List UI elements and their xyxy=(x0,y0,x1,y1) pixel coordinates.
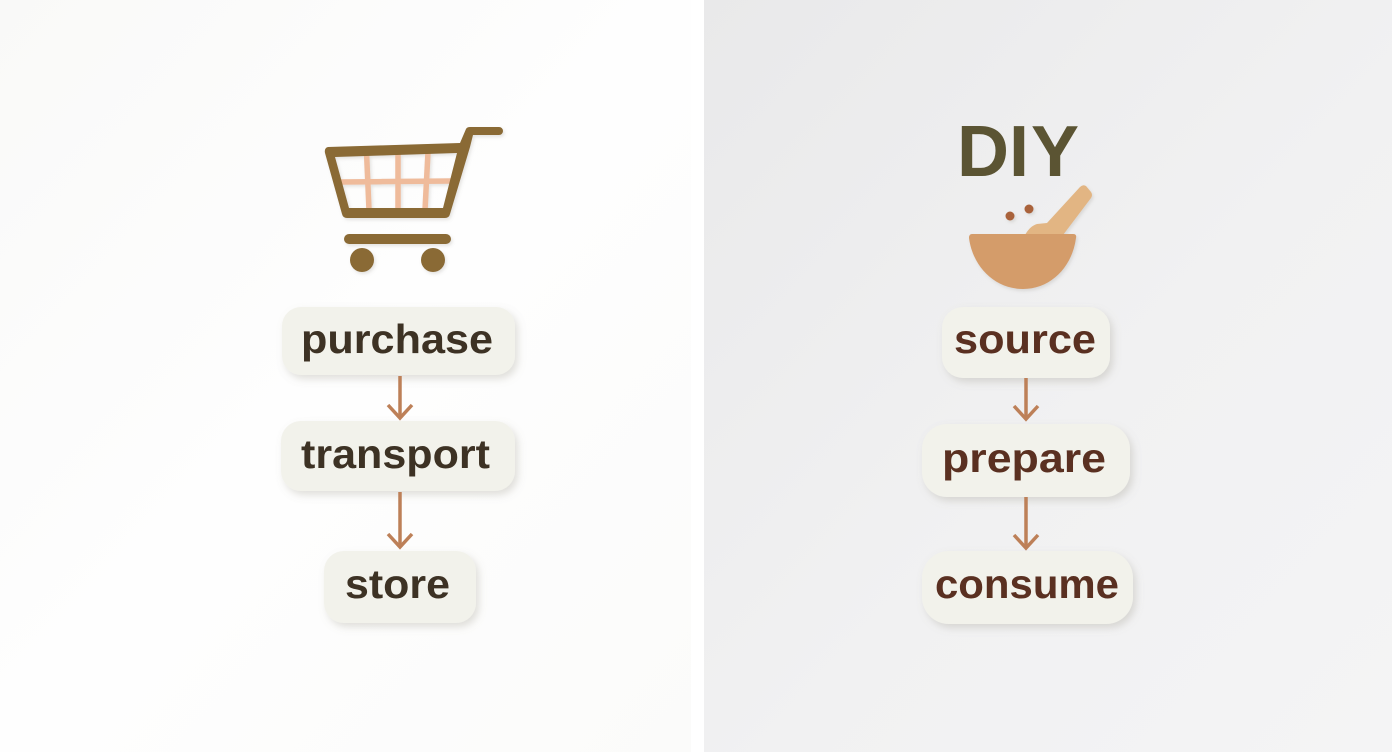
node: store: store xyxy=(345,561,450,607)
icon: mixing bowl with spoon xyxy=(969,185,1092,289)
arrow: purchase to transport xyxy=(388,376,412,418)
panel: purchase background xyxy=(0,0,691,752)
arrow: transport to store xyxy=(388,492,412,547)
arrow: prepare to consume xyxy=(1014,497,1038,548)
node: source xyxy=(942,307,1110,378)
node: purchase: purchase xyxy=(301,316,493,362)
node: prepare: prepare xyxy=(942,435,1106,481)
node: consume xyxy=(922,551,1133,624)
arrow: source to prepare xyxy=(1014,378,1038,419)
node: store xyxy=(324,551,476,623)
node: purchase xyxy=(282,307,515,375)
node: source: source xyxy=(954,316,1096,362)
node: transport xyxy=(281,421,515,491)
node: consume: consume xyxy=(935,561,1119,607)
icon: shopping cart xyxy=(325,127,503,272)
heading: DIY: DIY xyxy=(957,112,1079,192)
panel: DIY background xyxy=(704,0,1392,752)
node: transport: transport xyxy=(301,431,490,477)
node: prepare xyxy=(922,424,1130,497)
